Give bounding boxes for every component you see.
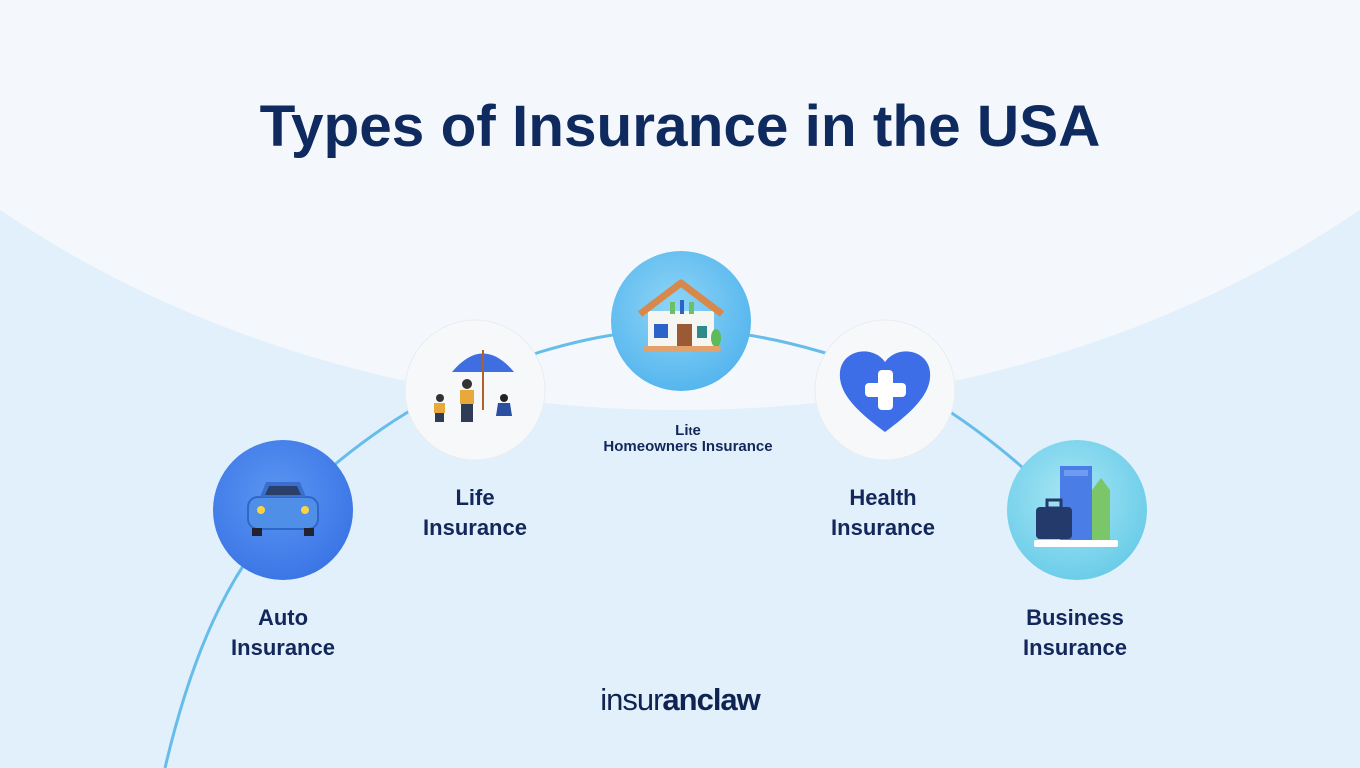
label: health bbox=[831, 485, 935, 540]
icon: house bbox=[611, 251, 751, 391]
label: homeowners: Homeowners Insurance bbox=[603, 438, 773, 455]
label: business: Business bbox=[1026, 605, 1124, 630]
label: homeowners bbox=[603, 422, 773, 455]
label: life: Life bbox=[455, 485, 495, 510]
label: life bbox=[423, 485, 527, 540]
title: Types of Insurance in the USA bbox=[260, 94, 1100, 159]
label: health: Insurance bbox=[831, 515, 935, 540]
icon: business bbox=[1007, 440, 1147, 580]
icon: life family umbrella bbox=[405, 320, 545, 460]
icon: auto car bbox=[213, 440, 353, 580]
icon: health heart bbox=[815, 320, 955, 460]
label: business: Insurance bbox=[1023, 635, 1127, 660]
label: life: Insurance bbox=[423, 515, 527, 540]
connecting arc bbox=[165, 330, 1077, 768]
label: health: Health bbox=[849, 485, 917, 510]
label: auto: Auto bbox=[258, 605, 308, 630]
label: homeowners: Lite bbox=[675, 422, 701, 439]
label: business bbox=[1023, 605, 1127, 660]
label: auto bbox=[231, 605, 335, 660]
label: auto: Insurance bbox=[231, 635, 335, 660]
logo: insuranclaw bbox=[600, 682, 760, 717]
